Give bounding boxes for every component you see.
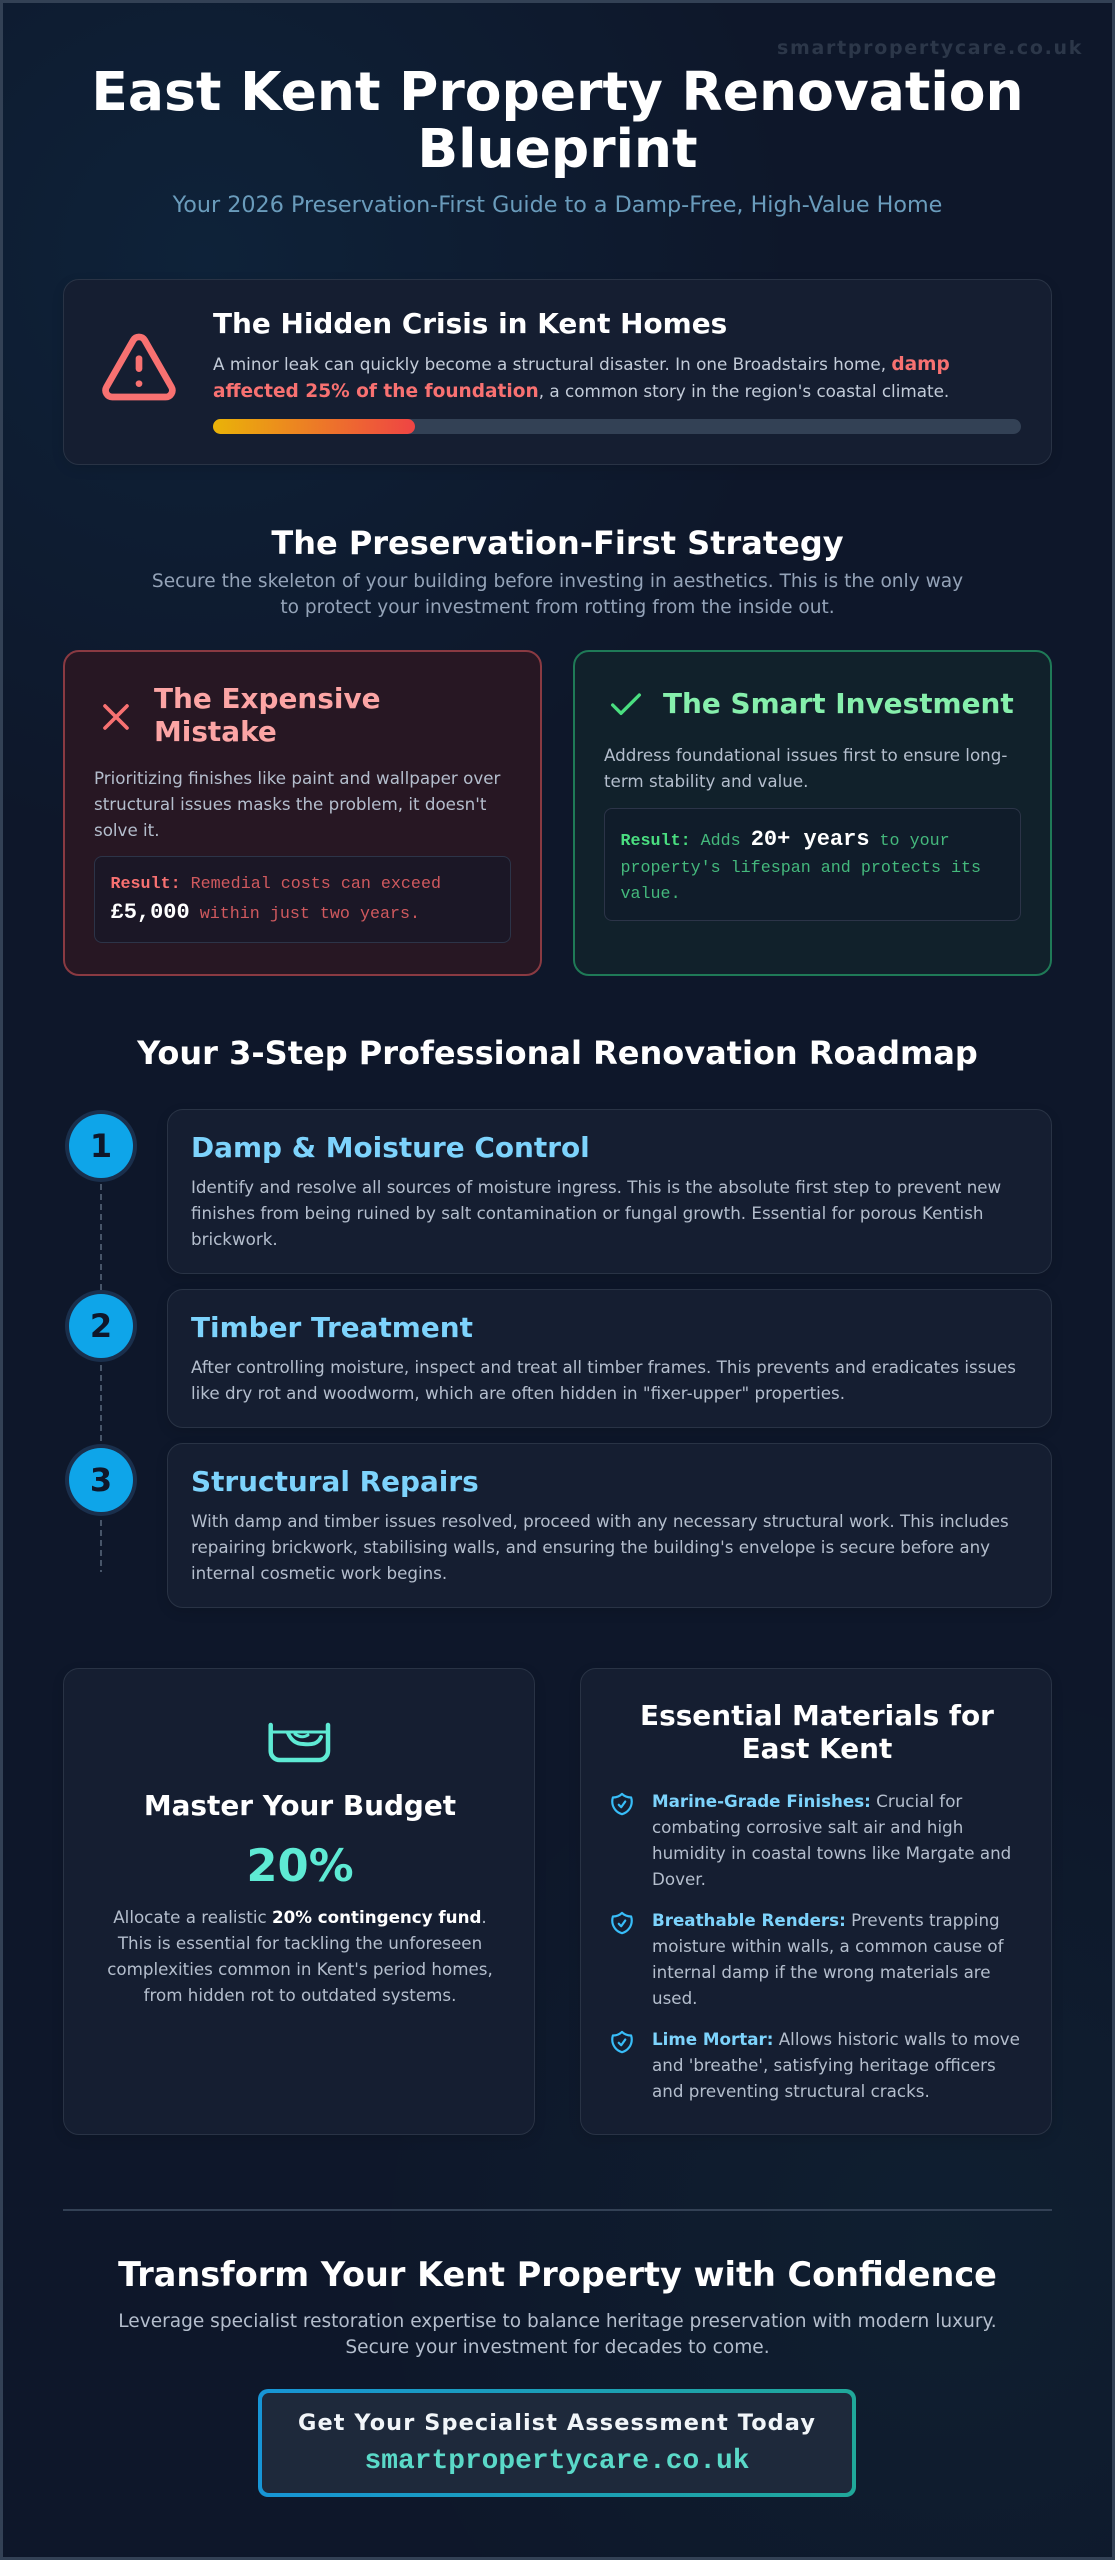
smart text: term stability and value. [604,771,808,791]
strategy text: to protect your investment from rotting from the inside out. [280,597,835,618]
mistake text [94,768,500,840]
step 3 text: repairing brickwork, stabilising walls, and ensuring the building's envelope is secure before any [191,1537,990,1557]
step 2 number [69,1294,133,1358]
mistake text: Prioritizing finishes like paint and wallpaper over [94,768,500,788]
budget text: from hidden rot to outdated systems. [144,1985,456,2005]
material 2 text: internal damp if the wrong materials are [652,1962,991,1982]
budget text [107,1907,493,2005]
watermark url: smartpropertycare.co.uk [777,37,1083,59]
step 3 card [167,1443,1052,1608]
crisis text: A minor leak can quickly become a structural disaster. In one Broadstairs home, damp [213,354,950,375]
panel: hidden crisis [63,279,1052,465]
step 1 text: Identify and resolve all sources of moisture ingress. This is the absolute first step to prevent new [191,1177,1001,1197]
progress bar track [213,419,1021,434]
material 2 [611,1910,1004,2008]
material 3 text: and preventing structural cracks. [652,2081,930,2101]
mistake heading: Mistake [154,714,277,748]
material 2 text: Breathable Renders: Prevents trapping [652,1910,1000,1930]
material 3 text [652,2029,1020,2101]
step 1 text [191,1177,1001,1249]
material 1 text: humidity in coastal towns like Margate and [652,1843,1011,1863]
mistake result box [94,856,511,943]
step 3 text: With damp and timber issues resolved, proceed with any necessary structural work. This includes [191,1511,1009,1531]
icon: shield check [611,2030,633,2054]
step 3 number: 3 [90,1461,112,1499]
strategy text: Secure the skeleton of your building before investing in aesthetics. This is the only way [152,571,963,592]
material 3 [611,2029,1020,2101]
button url: smartpropertycare.co.uk [365,2446,749,2477]
smart text [604,745,1007,791]
mistake result text [110,875,441,925]
step 2 title: Timber Treatment [191,1311,473,1344]
step 3 text: internal cosmetic work begins. [191,1563,447,1583]
materials heading [640,1699,994,1765]
materials heading: East Kent [742,1732,892,1765]
material 3 text: Lime Mortar: Allows historic walls to move [652,2029,1020,2049]
mistake result text: Result: Remedial costs can exceed [110,875,441,894]
material 2 text: used. [652,1988,697,2008]
material 2 text: moisture within walls, a common cause of [652,1936,1004,1956]
smart result text: property's lifespan and protects its [620,858,981,878]
closing text: Leverage specialist restoration expertise to balance heritage preservation with modern luxury. [118,2310,997,2332]
mistake text: structural issues masks the problem, it doesn't [94,794,486,814]
strategy text [152,571,963,618]
step 2 text [191,1357,1016,1403]
step 1 connector [100,1184,102,1292]
mistake result text: £5,000 within just two years. [110,900,420,925]
step 1 text: brickwork. [191,1229,278,1249]
smart result box [604,808,1021,921]
material 2 text [652,1910,1004,2008]
smart text: Address foundational issues first to ensure long- [604,745,1007,765]
budget text: Allocate a realistic 20% contingency fund. [113,1907,487,1927]
crisis text: affected 25% of the foundation, a common story in the region's coastal climate. [213,381,949,402]
panel: expensive mistake [63,650,542,976]
button label: Get Your Specialist Assessment Today [298,2410,816,2436]
smart result text: Result: Adds 20+ years to your [620,827,950,852]
mistake text: solve it. [94,820,160,840]
step 1 number [69,1114,133,1178]
strategy heading: The Preservation-First Strategy [271,524,844,562]
budget text: This is essential for tackling the unforeseen [118,1933,482,1953]
icon: wallet [268,1722,330,1762]
progress bar fill 25% [213,419,415,434]
step 1 text: finishes from being ruined by salt contamination or fungal growth. Essential for porous Kentish [191,1203,984,1223]
material 1 text: Marine-Grade Finishes: Crucial for [652,1791,962,1811]
button inner [262,2393,852,2493]
step 2 number: 2 [90,1307,112,1345]
material 3 text: and 'breathe', satisfying heritage officers [652,2055,996,2075]
step 1 card [167,1109,1052,1274]
step 2 connector [100,1365,102,1441]
mistake heading [154,682,381,748]
icon: warning triangle [102,334,176,400]
mistake heading: The Expensive [154,682,381,714]
smart result text [620,827,981,904]
budget 20 percent: 20% [246,1839,354,1892]
icon: x [103,704,129,730]
step 3 number [69,1448,133,1512]
step 2 text: After controlling moisture, inspect and treat all timber frames. This prevents and eradicates issues [191,1357,1016,1377]
material 1 text: Dover. [652,1869,706,1889]
title: Blueprint [417,117,698,180]
panel: materials [580,1668,1052,2135]
step 1 number: 1 [90,1127,112,1165]
closing text [118,2310,997,2358]
panel: budget [63,1668,535,2135]
materials heading: Essential Materials for [640,1699,994,1732]
material 1 [611,1791,1011,1889]
crisis text [213,354,950,402]
icon: shield check [611,1912,633,1934]
budget heading: Master Your Budget [144,1788,456,1822]
roadmap heading: Your 3-Step Professional Renovation Roadmap [137,1034,978,1072]
title [91,60,1024,180]
step 3 text [191,1511,1009,1583]
crisis heading: The Hidden Crisis in Kent Homes [213,307,727,340]
closing heading: Transform Your Kent Property with Confidence [118,2254,997,2294]
subtitle: Your 2026 Preservation-First Guide to a Damp-Free, High-Value Home [173,192,942,218]
budget text: complexities common in Kent's period homes, [107,1959,493,1979]
material 1 text [652,1791,1011,1889]
smart result text: value. [620,885,681,904]
material 1 text: combating corrosive salt air and high [652,1817,963,1837]
title: East Kent Property Renovation [91,60,1024,123]
smart heading: The Smart Investment [663,687,1014,720]
panel: smart investment [573,650,1052,976]
icon: check [610,693,642,716]
step 3 connector [100,1520,102,1572]
closing text: Secure your investment for decades to come. [345,2336,770,2358]
step 1 title: Damp & Moisture Control [191,1131,590,1164]
step 2 card [167,1289,1052,1428]
icon: shield check [611,1792,633,1816]
call to action button [258,2389,856,2497]
step 3 title: Structural Repairs [191,1465,479,1498]
step 2 text: like dry rot and woodworm, which are often hidden in "fixer-upper" properties. [191,1383,845,1403]
